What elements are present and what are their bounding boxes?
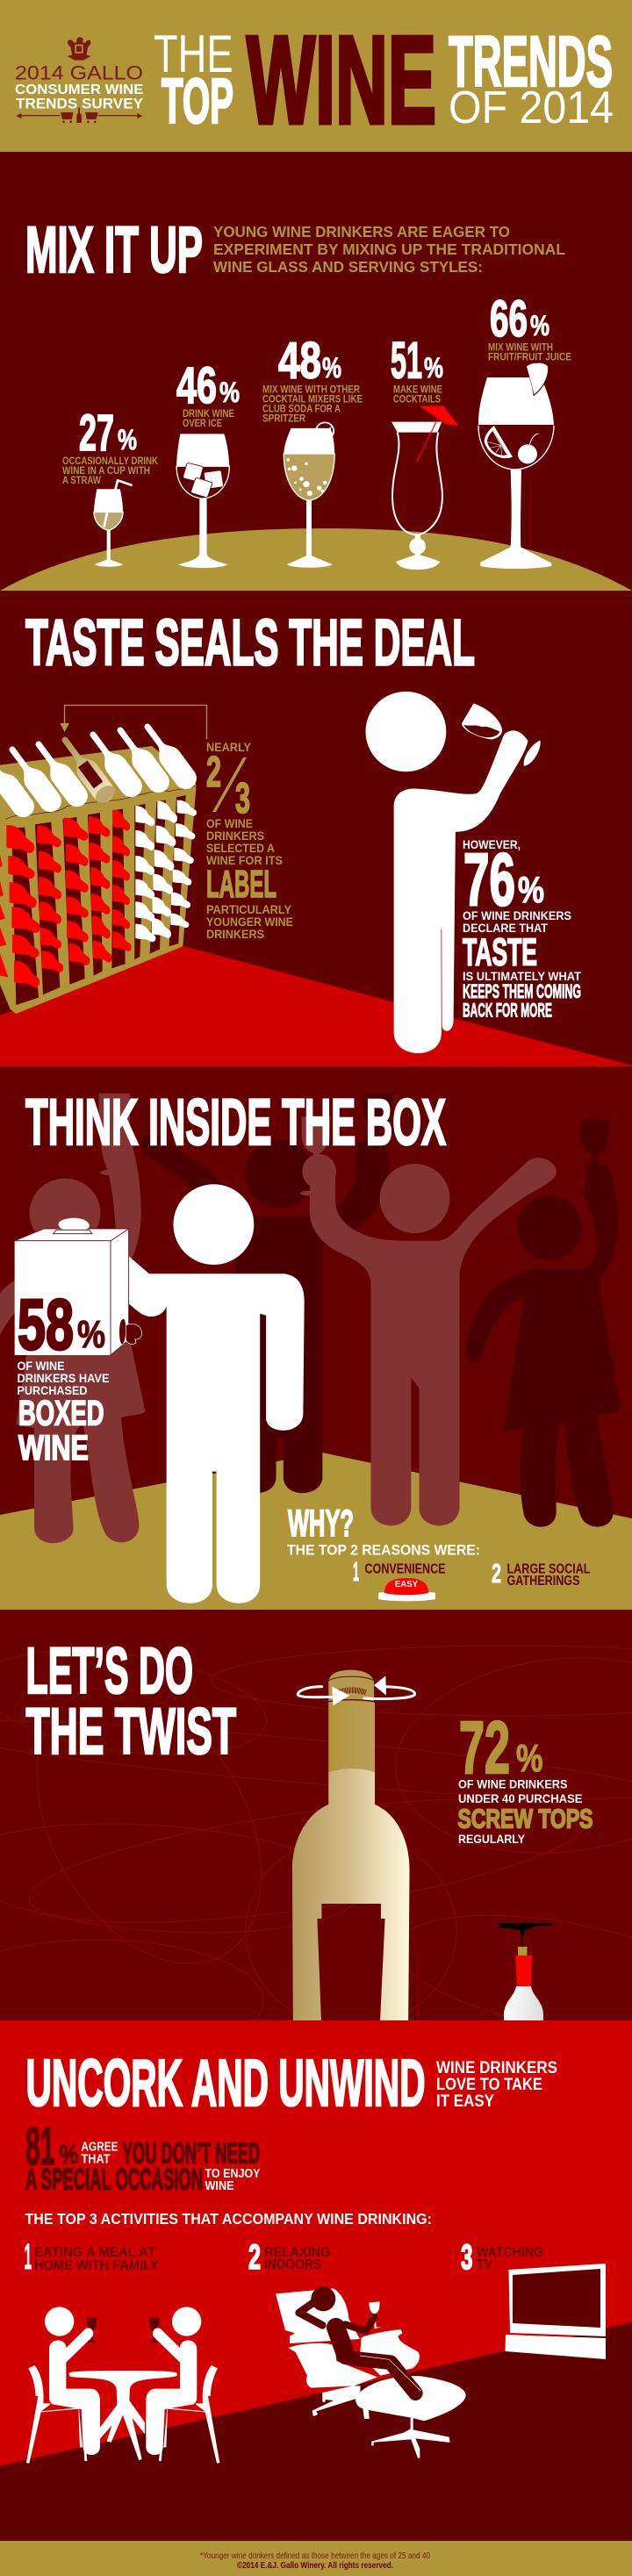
text: wine drinkers love to take it easy: IT EASY xyxy=(436,2092,494,2111)
gold floor xyxy=(0,1453,632,1610)
stat: 58 percent boxed wine: % xyxy=(77,1313,105,1356)
text: 72 percent screw tops: % xyxy=(516,1737,542,1780)
text: 76 percent taste: HOWEVER, xyxy=(463,837,521,851)
panel: mix it up xyxy=(0,152,632,591)
icon: glass with straw xyxy=(94,480,133,567)
icon: glass with ice xyxy=(176,434,229,568)
stat: 58 percent boxed wine: 58 xyxy=(18,1285,74,1365)
icon: screw top bottle xyxy=(292,1670,415,2020)
footer: ©2014 E.&J. Gallo Winery. All rights reserved. xyxy=(237,2561,393,2571)
heading: let's do the twist: THE TWIST xyxy=(26,1695,236,1768)
text: two thirds label: SELECTED A xyxy=(206,841,275,855)
logo: 2014 Gallo consumer wine trends survey: CONSUMER WINE xyxy=(15,83,144,97)
rack openings xyxy=(11,795,186,1005)
arrows: twist xyxy=(298,1675,415,1705)
wavy rack edge xyxy=(6,786,196,819)
text: two thirds label: NEARLY xyxy=(206,740,252,754)
text: 72 percent screw tops: UNDER 40 PURCHASE xyxy=(458,1791,583,1805)
text: two thirds label: OF WINE xyxy=(206,816,253,830)
footer xyxy=(0,2541,632,2576)
heading: mix it up: MIX IT UP xyxy=(25,213,203,286)
dark floor xyxy=(0,2322,632,2542)
title: The Top Wine Trends of 2014: OF 2014 xyxy=(449,83,614,133)
stat: 58 percent boxed wine xyxy=(18,1285,109,1467)
stat: 48 percent: COCKTAIL MIXERS LIKE xyxy=(262,393,363,405)
stat: 81 percent: YOU DON’T NEED xyxy=(122,2136,260,2170)
diner right xyxy=(146,2307,219,2464)
text: two thirds label: PARTICULARLY xyxy=(206,902,292,916)
stat: 27 percent: A STRAW xyxy=(62,474,102,486)
text: two thirds label: YOUNGER WINE xyxy=(206,915,293,929)
silhouette: dark woman xyxy=(465,1120,621,1527)
footer: *Younger wine drinkers defined as those between the ages of 25 and 40 xyxy=(200,2551,430,2561)
stat: 81 percent: TO ENJOY xyxy=(205,2167,261,2181)
text: why, top 2 reasons: CONVENIENCE xyxy=(365,1562,446,1576)
stat: 81 percent: AGREE xyxy=(81,2140,118,2154)
heading: let's do the twist xyxy=(26,1634,236,1768)
icon: spritzer glass xyxy=(284,422,334,568)
text: why, top 2 reasons: 2 xyxy=(492,1558,501,1589)
text: 76 percent taste: 76 xyxy=(463,838,515,921)
text: intro xyxy=(213,223,565,276)
text: wine drinkers love to take it easy: WINE DRINKERS xyxy=(436,2058,557,2077)
text: wine drinkers love to take it easy: LOVE TO TAKE xyxy=(436,2075,542,2094)
icon: big glass with fruit xyxy=(478,363,554,569)
stat: 27 percent: WINE IN A CUP WITH xyxy=(62,464,150,477)
text: 72 percent screw tops: SCREW TOPS xyxy=(458,1805,593,1834)
item: eating a meal at home xyxy=(25,2236,159,2277)
stat: 81 percent: 81 xyxy=(25,2117,54,2176)
stat: 48 percent: % xyxy=(322,352,341,384)
background swirl lines xyxy=(0,1645,632,2020)
icon: easy button: EASY xyxy=(395,1579,418,1589)
icon: carts and bottle arrow xyxy=(16,108,142,123)
stat: 48 percent xyxy=(262,332,363,425)
red floor xyxy=(0,946,632,1066)
icon: bottles on top of rack xyxy=(0,718,201,822)
stat: 66 percent: FRUIT/FRUIT JUICE xyxy=(488,351,571,363)
stat: 51 percent: COCKTAILS xyxy=(393,393,441,405)
text: 72 percent screw tops: OF WINE DRINKERS xyxy=(458,1776,567,1790)
item: eating a meal at home: EATING A MEAL AT xyxy=(34,2245,155,2260)
icon: lounge chair with reclining person xyxy=(276,2286,466,2458)
white bottles xyxy=(135,800,197,942)
panel: header xyxy=(0,0,632,152)
text: 76 percent taste: IS ULTIMATELY WHAT xyxy=(463,969,581,983)
item: relaxing indoors: INDOORS xyxy=(264,2257,322,2272)
stat: 66 percent: % xyxy=(530,310,549,341)
stat: 51 percent: MAKE WINE xyxy=(393,383,442,395)
text: 72 percent screw tops: 72 xyxy=(459,1706,510,1789)
title: The Top Wine Trends of 2014: TOP xyxy=(162,67,233,137)
stat: 46 percent: % xyxy=(219,377,240,408)
text: why, top 2 reasons: LARGE SOCIAL xyxy=(507,1562,590,1576)
text: top 3 activities heading: THE TOP 3 ACTIVITIES THAT ACCOMPANY WINE DRINKING: xyxy=(25,2210,432,2228)
reclining person xyxy=(299,2286,420,2393)
item: watching tv: WATCHING xyxy=(477,2245,543,2260)
text: intro: YOUNG WINE DRINKERS ARE EAGER TO xyxy=(213,223,510,240)
text: wine drinkers love to take it easy xyxy=(436,2058,557,2111)
figure: person holding box xyxy=(129,1184,305,1604)
icon: television xyxy=(506,2264,606,2359)
stat: 81 percent: A SPECIAL OCCASION xyxy=(25,2163,203,2196)
icon: hurricane glass with umbrella xyxy=(391,406,458,570)
text: why, top 2 reasons: 1 xyxy=(353,1556,359,1587)
stat: 27 percent: % xyxy=(118,424,137,456)
stat: 51 percent: 51 xyxy=(391,332,422,390)
icon: easy button xyxy=(378,1578,435,1601)
item: eating a meal at home: 1 xyxy=(25,2236,32,2277)
diner left xyxy=(26,2307,100,2464)
icon: crest xyxy=(68,37,90,61)
item: relaxing indoors: 2 xyxy=(248,2238,261,2277)
icon: selected gold bottle with label xyxy=(54,731,118,807)
rack frame xyxy=(0,746,196,1014)
logo: 2014 Gallo consumer wine trends survey: TRENDS SURVEY xyxy=(16,97,143,112)
text: 72 percent screw tops: REGULARLY xyxy=(458,1832,526,1846)
silhouette: dark man xyxy=(141,1094,391,1493)
icon: person tasting wine xyxy=(365,692,541,1053)
stat: 66 percent: MIX WINE WITH xyxy=(488,341,553,353)
text: two thirds label: DRINKERS xyxy=(206,829,264,843)
table xyxy=(68,2371,177,2460)
stat: 27 percent xyxy=(62,405,158,486)
text: two thirds label: WINE FOR ITS xyxy=(206,853,283,867)
stat: 81 percent: THAT xyxy=(81,2152,111,2166)
item: watching tv: TV xyxy=(477,2257,492,2272)
text: why, top 2 reasons: WHY? xyxy=(288,1503,354,1545)
stat: 58 percent boxed wine: PURCHASED xyxy=(18,1383,88,1397)
logo: 2014 Gallo consumer wine trends survey: 2014 GALLO xyxy=(15,61,143,84)
stat: 81 percent: % xyxy=(60,2139,79,2170)
stat: 27 percent: 27 xyxy=(79,405,114,462)
text: two thirds label xyxy=(206,740,293,941)
stat: 81 percent: WINE xyxy=(205,2179,234,2193)
stat: 46 percent: OVER ICE xyxy=(183,417,222,429)
stat: 58 percent boxed wine: OF WINE xyxy=(18,1359,65,1373)
title: The Top Wine Trends of 2014: WINE xyxy=(247,11,436,150)
text: why, top 2 reasons: GATHERINGS xyxy=(507,1574,579,1589)
text: 72 percent screw tops xyxy=(458,1706,593,1846)
stat: 66 percent: 66 xyxy=(490,291,528,348)
item: watching tv xyxy=(461,2238,543,2277)
stat: 46 percent: DRINK WINE xyxy=(183,407,234,420)
logo: 2014 Gallo consumer wine trends survey xyxy=(15,37,144,123)
stat: 81 percent xyxy=(25,2117,261,2196)
stat: 51 percent: % xyxy=(424,352,443,384)
red bottles xyxy=(0,810,132,987)
icon: wine rack xyxy=(0,746,197,1014)
stat: 58 percent boxed wine: DRINKERS HAVE xyxy=(18,1371,109,1385)
stat: 48 percent: SPRITZER xyxy=(262,413,305,425)
silhouette: light man xyxy=(300,1116,557,1525)
arrow: bracket to bottle xyxy=(60,706,207,739)
item: eating a meal at home: HOME WITH FAMILY xyxy=(34,2258,159,2273)
panel: taste seals the deal xyxy=(0,591,632,1066)
text: two thirds label: 2 xyxy=(206,749,221,796)
item: relaxing indoors: RELAXING xyxy=(264,2245,330,2260)
stat: 48 percent: CLUB SODA FOR A xyxy=(262,402,341,414)
panel: think inside the box xyxy=(0,1066,632,1610)
text: two thirds label: 3 xyxy=(235,775,250,822)
stat: 58 percent boxed wine: WINE xyxy=(18,1429,89,1467)
text: 76 percent taste: TASTE xyxy=(463,930,537,974)
panel: let's do the twist xyxy=(0,1610,632,2063)
stat: 48 percent: 48 xyxy=(278,332,321,390)
text: two thirds label: LABEL xyxy=(206,863,276,906)
text: why, top 2 reasons xyxy=(287,1503,590,1589)
text: two thirds label: DRINKERS xyxy=(206,927,264,941)
stat: 46 percent: 46 xyxy=(176,357,217,414)
heading: let's do the twist: LET’S DO xyxy=(26,1634,193,1707)
stat: 27 percent: OCCASIONALLY DRINK xyxy=(62,455,158,467)
icon: couple at table xyxy=(26,2307,219,2464)
text: why, top 2 reasons: THE TOP 2 REASONS WERE: xyxy=(287,1541,480,1559)
item: relaxing indoors xyxy=(248,2238,330,2277)
table surface xyxy=(0,528,632,591)
text: intro: EXPERIMENT BY MIXING UP THE TRADITIONAL xyxy=(213,240,565,258)
stat: 48 percent: MIX WINE WITH OTHER xyxy=(262,383,360,395)
text: 76 percent taste: % xyxy=(518,869,544,910)
icon: corked bottle with corkscrew xyxy=(499,1923,553,2020)
text: 76 percent taste: OF WINE DRINKERS xyxy=(463,908,571,922)
title: The Top Wine Trends of 2014: THE xyxy=(154,25,233,83)
text: 76 percent taste: DECLARE THAT xyxy=(463,921,548,935)
item: watching tv: 3 xyxy=(461,2238,472,2277)
text: 76 percent taste: BACK FOR MORE xyxy=(463,999,552,1022)
text: intro: WINE GLASS AND SERVING STYLES: xyxy=(213,258,483,276)
stat: 58 percent boxed wine: BOXED xyxy=(18,1394,104,1432)
silhouette: light woman xyxy=(0,1094,145,1543)
icon: wine box xyxy=(15,1218,142,1355)
stat: 66 percent xyxy=(488,291,571,363)
text: 76 percent taste xyxy=(463,837,581,1022)
panel: uncork and unwind xyxy=(0,2020,632,2542)
